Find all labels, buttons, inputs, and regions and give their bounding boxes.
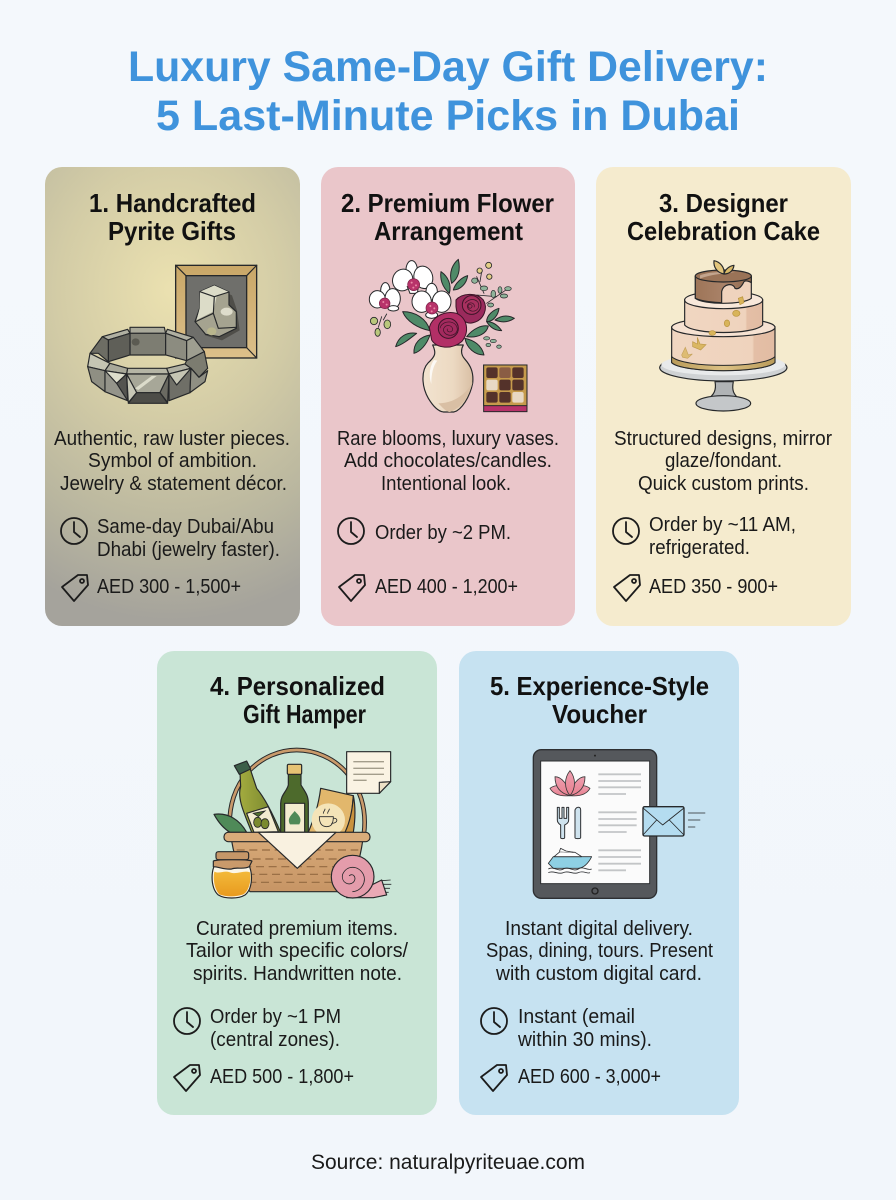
illustration: framed pyrite and bracelet xyxy=(88,265,257,403)
icon: clock xyxy=(481,1008,507,1034)
heading xyxy=(341,188,554,246)
description xyxy=(337,428,559,495)
roses xyxy=(429,294,485,347)
illustration: flowers in a vase with chocolates xyxy=(369,259,527,412)
delivery note: Dhabi (jewelry faster). xyxy=(97,539,280,561)
delivery note: Order by ~1 PM xyxy=(210,1006,341,1028)
illustration: gift hamper basket xyxy=(212,750,391,898)
description xyxy=(614,428,832,495)
description: with custom digital card. xyxy=(495,963,702,985)
description: Structured designs, mirror xyxy=(614,428,832,450)
delivery note xyxy=(517,1006,652,1051)
price: AED 600 - 3,000+ xyxy=(518,1066,661,1088)
delivery note: Instant (email xyxy=(518,1006,635,1028)
heading: Voucher xyxy=(552,699,647,729)
heading xyxy=(210,671,385,729)
description: Symbol of ambition. xyxy=(88,450,257,472)
price: AED 500 - 1,800+ xyxy=(210,1066,354,1088)
icon: clock xyxy=(174,1008,200,1034)
description: Add chocolates/candles. xyxy=(344,450,552,472)
handle xyxy=(230,750,365,833)
delivery note: Same-day Dubai/Abu xyxy=(97,516,274,538)
orchids xyxy=(369,261,451,318)
gold leaves on top xyxy=(714,261,724,274)
bracelet front xyxy=(88,353,110,371)
panel: 2. Premium Flower Arrangement xyxy=(321,167,575,626)
stand xyxy=(707,382,740,399)
yacht icon xyxy=(548,848,592,873)
card background xyxy=(596,167,851,626)
icon: price tag xyxy=(481,1065,507,1091)
heading: 2. Premium Flower xyxy=(341,188,554,218)
delivery note: Order by ~2 PM. xyxy=(375,522,511,544)
envelope xyxy=(643,807,684,836)
price: AED 350 - 900+ xyxy=(649,576,778,598)
icon: clock xyxy=(338,518,364,544)
icon: clock xyxy=(613,518,639,544)
delivery note xyxy=(210,1006,341,1051)
top tier xyxy=(695,276,751,303)
heading: 1. Handcrafted xyxy=(89,188,256,218)
icon: clock xyxy=(61,518,87,544)
heading: 3. Designer xyxy=(659,188,788,218)
description: Jewelry & statement décor. xyxy=(60,473,287,495)
heading xyxy=(89,188,256,246)
delivery note xyxy=(649,514,796,559)
card background xyxy=(157,651,437,1115)
napkin xyxy=(258,832,336,868)
gift note xyxy=(347,752,391,793)
panel: 3. Designer Celebration Cake xyxy=(596,167,851,626)
text lines xyxy=(598,774,641,870)
delivery note: Order by ~11 AM, xyxy=(649,514,796,536)
fork and knife icon xyxy=(557,807,581,839)
lotus icon xyxy=(550,771,590,796)
description: Intentional look. xyxy=(381,473,511,495)
vase xyxy=(423,345,473,412)
price: AED 300 - 1,500+ xyxy=(97,576,241,598)
description xyxy=(486,918,713,985)
description: Instant digital delivery. xyxy=(505,918,693,940)
heading: 5. Experience-Style xyxy=(490,671,709,701)
description: Tailor with specific colors/ xyxy=(186,940,408,962)
delivery note: (central zones). xyxy=(210,1029,340,1051)
middle tier xyxy=(685,299,763,332)
panel: 5. Experience-Style Voucher xyxy=(459,651,739,1115)
description: spirits. Handwritten note. xyxy=(193,963,402,985)
description xyxy=(186,918,408,985)
description: Curated premium items. xyxy=(196,918,398,940)
towel roll xyxy=(347,880,387,898)
icon: price tag xyxy=(339,575,365,601)
illustration: tablet voucher with envelope xyxy=(533,750,705,898)
heading: Arrangement xyxy=(374,216,523,246)
oil bottle xyxy=(240,768,281,832)
description: Quick custom prints. xyxy=(638,473,809,495)
card background xyxy=(321,167,575,626)
source: Source: naturalpyriteuae.com xyxy=(311,1151,585,1174)
card background xyxy=(459,651,739,1115)
panel: 4. Personalized Gift Hamper xyxy=(157,651,437,1115)
heading: Pyrite Gifts xyxy=(108,216,236,246)
gold flakes xyxy=(682,297,744,358)
delivery note: refrigerated. xyxy=(649,537,750,559)
illustration: three-tier cake xyxy=(660,261,787,411)
title xyxy=(128,43,768,140)
heading: Gift Hamper xyxy=(243,699,366,729)
title: Luxury Same-Day Gift Delivery: xyxy=(128,43,768,91)
coffee bag xyxy=(308,788,353,832)
price: AED 400 - 1,200+ xyxy=(375,576,518,598)
wine bottle xyxy=(281,774,308,832)
heading: 4. Personalized xyxy=(210,671,385,701)
basket body xyxy=(232,841,363,892)
card background xyxy=(45,167,300,626)
delivery note xyxy=(97,516,280,561)
description: Authentic, raw luster pieces. xyxy=(54,428,290,450)
delivery note: within 30 mins). xyxy=(517,1029,652,1051)
leaf xyxy=(214,814,247,832)
description xyxy=(54,428,290,495)
panel: 1. Handcrafted Pyrite Gifts xyxy=(45,167,300,626)
bracelet back xyxy=(130,327,166,333)
description: Spas, dining, tours. Present xyxy=(486,940,713,962)
heading xyxy=(490,671,709,729)
description: glaze/fondant. xyxy=(665,450,782,472)
bottom tier xyxy=(672,327,775,371)
heading: Celebration Cake xyxy=(627,216,820,246)
honey jar xyxy=(212,860,251,898)
icon: price tag xyxy=(62,575,88,601)
motion lines xyxy=(688,813,705,827)
title: 5 Last-Minute Picks in Dubai xyxy=(156,92,740,140)
heading xyxy=(627,188,820,246)
icon: price tag xyxy=(174,1065,200,1091)
description: Rare blooms, luxury vases. xyxy=(337,428,559,450)
chocolate box xyxy=(484,365,527,412)
icon: price tag xyxy=(614,575,640,601)
